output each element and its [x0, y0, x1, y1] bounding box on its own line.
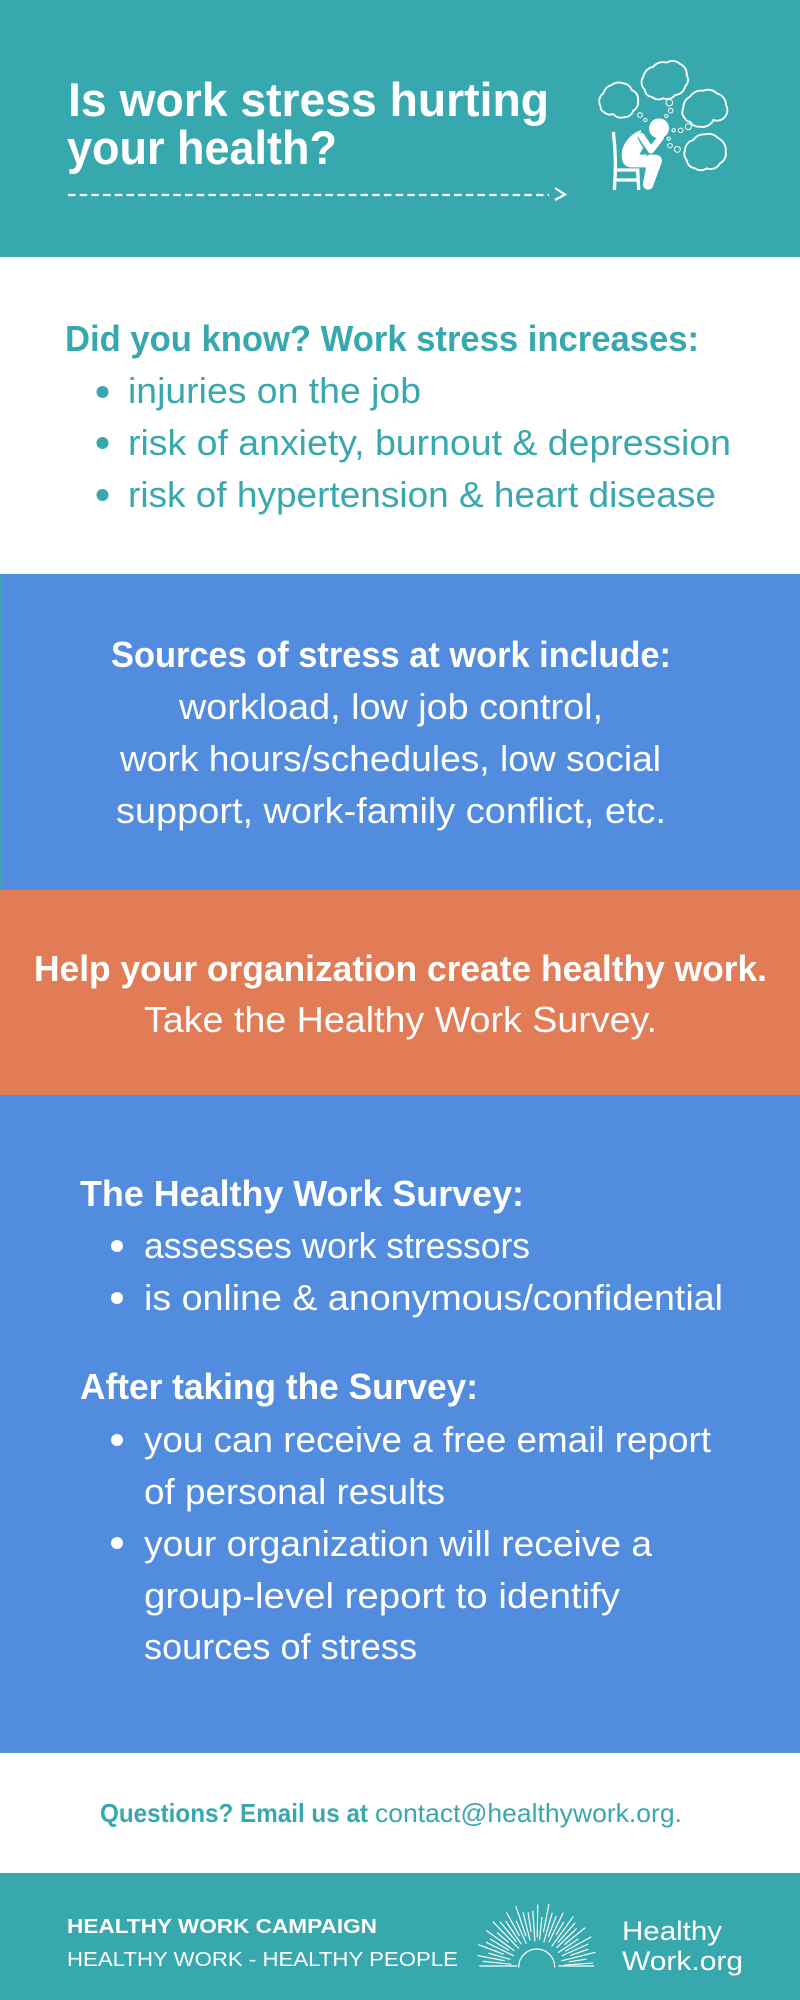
dashed arrow	[68, 188, 565, 200]
panel: survey details	[0, 1095, 800, 1753]
text: tagline: HEALTHY WORK - HEALTHY PEOPLE	[67, 1949, 458, 1971]
text: contact email: contact@healthywork.org.	[375, 1798, 682, 1828]
icon: sunburst logo	[478, 1904, 595, 1967]
list: after survey results: sources of stress	[144, 1626, 417, 1667]
text: contact email: Questions? Email us at	[100, 1798, 368, 1828]
list: after survey results: your organization will receive a	[144, 1523, 653, 1564]
list: after survey results: group-level report to identify	[144, 1575, 620, 1616]
text block: stress sources: support, work-family conflict, etc.	[116, 790, 666, 831]
list: health risks: risk of anxiety, burnout & depression	[128, 422, 731, 463]
panel: call to action	[0, 890, 800, 1095]
heading: create healthy work: Help your organization create healthy work.	[34, 948, 767, 989]
icon: stressed person on chair with thought clouds	[599, 61, 727, 190]
title	[67, 73, 549, 174]
logo wordmark: Healthy	[622, 1916, 723, 1946]
text: contact email	[100, 1798, 682, 1828]
panel: header	[0, 0, 800, 257]
panel: sources of stress	[0, 574, 800, 890]
text block: stress sources: workload, low job control,	[178, 686, 603, 727]
list: health risks	[96, 370, 731, 515]
list: after survey results: of personal results	[144, 1471, 445, 1512]
list: survey features: is online & anonymous/confidential	[144, 1277, 723, 1318]
text block: stress sources	[116, 686, 666, 831]
heading: the healthy work survey: The Healthy Work Survey:	[80, 1173, 524, 1214]
list: survey features	[111, 1225, 723, 1318]
text: take the survey: Take the Healthy Work Survey.	[144, 999, 657, 1040]
panel: did you know	[65, 318, 731, 515]
text: campaign name: HEALTHY WORK CAMPAIGN	[67, 1916, 377, 1938]
title: Is work stress hurting	[68, 73, 549, 126]
panel: footer	[0, 1873, 800, 2000]
heading: after taking the survey: After taking the Survey:	[80, 1366, 478, 1407]
heading: sources of stress: Sources of stress at work include:	[111, 634, 671, 675]
logo wordmark	[622, 1916, 743, 1976]
list: after survey results	[111, 1419, 711, 1667]
title: your health?	[67, 121, 337, 174]
list: after survey results: you can receive a free email report	[144, 1419, 711, 1460]
list: health risks: injuries on the job	[128, 370, 421, 411]
list: survey features: assesses work stressors	[144, 1225, 530, 1266]
heading: work stress increases: Did you know? Work stress increases:	[65, 318, 699, 359]
text block: stress sources: work hours/schedules, low social	[119, 738, 661, 779]
list: health risks: risk of hypertension & heart disease	[128, 474, 716, 515]
logo wordmark: Work.org	[622, 1946, 743, 1976]
